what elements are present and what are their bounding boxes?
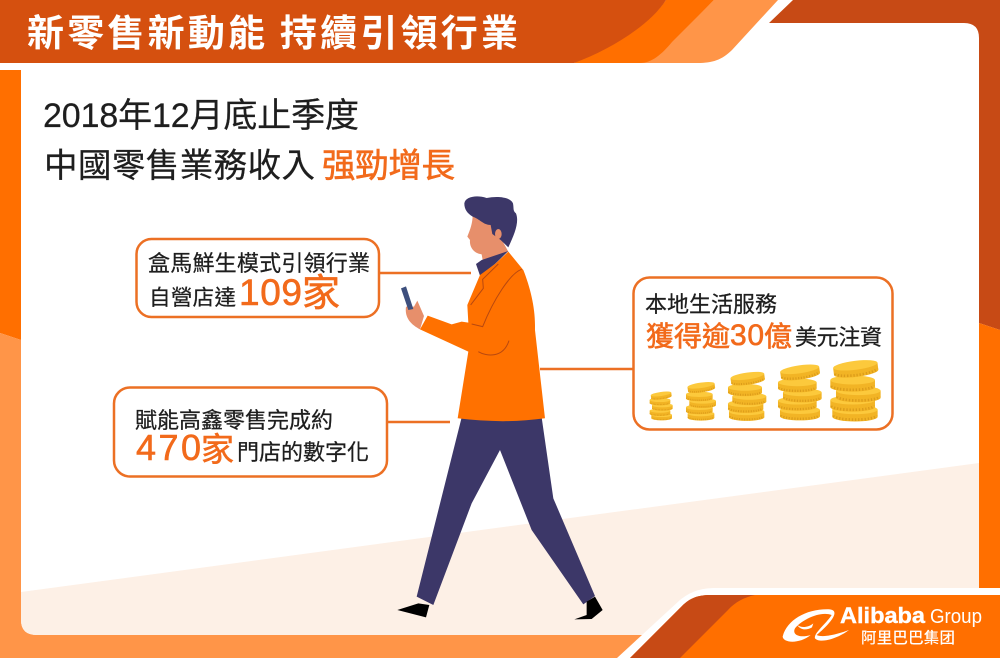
title: 新零售新動能 持續引領行業 — [27, 3, 518, 57]
panel: cream floor — [21, 463, 979, 635]
callout: Sun Art stores: 家 — [201, 431, 234, 468]
callout: local services funding: 美元注資 — [795, 325, 882, 350]
heading: period and China retail revenue: 中國零售業務收入 — [44, 148, 315, 185]
footer banner — [617, 588, 1000, 658]
callout: Sun Art stores: 門店的數字化 — [237, 440, 369, 465]
heading: period and China retail revenue: 2018年12月底止季度 — [43, 97, 359, 135]
connector lines — [379, 273, 633, 422]
trousers — [417, 417, 595, 605]
callout: Hema stores: 盒馬鮮生模式引領行業 — [148, 251, 370, 276]
callout: local services funding: 本地生活服務 — [645, 292, 777, 317]
logo: Alibaba Group: 阿里巴巴集团 — [861, 626, 955, 648]
header banner — [0, 0, 778, 63]
callout: Sun Art stores: 470 — [136, 427, 201, 468]
upper body — [401, 196, 545, 421]
illustration: walking man with phone — [397, 196, 603, 619]
heading: period and China retail revenue: 强勁增長 — [322, 148, 455, 185]
callout: Hema stores — [136, 239, 379, 317]
callout: local services funding: 獲得逾 — [646, 321, 730, 352]
logo: Alibaba Group — [783, 603, 982, 648]
shoes — [397, 597, 603, 619]
icon: stacks of gold coins — [650, 358, 881, 421]
callout: Hema stores: 109 — [239, 272, 302, 313]
icon: Alibaba smile mark — [783, 609, 849, 642]
callout: Hema stores: 自營店達 — [149, 286, 236, 310]
callout: Sun Art stores: 賦能高鑫零售完成約 — [135, 408, 333, 433]
callout: Sun Art stores — [114, 388, 387, 476]
callout: local services funding: 億 — [764, 321, 792, 352]
heading: period and China retail revenue — [43, 97, 455, 185]
callout: local services funding — [634, 278, 892, 430]
callout: Hema stores: 家 — [302, 273, 340, 315]
logo: Alibaba Group: Alibaba — [840, 603, 926, 628]
logo: Alibaba Group: Group — [930, 606, 982, 628]
callout: local services funding: 30 — [730, 319, 764, 352]
